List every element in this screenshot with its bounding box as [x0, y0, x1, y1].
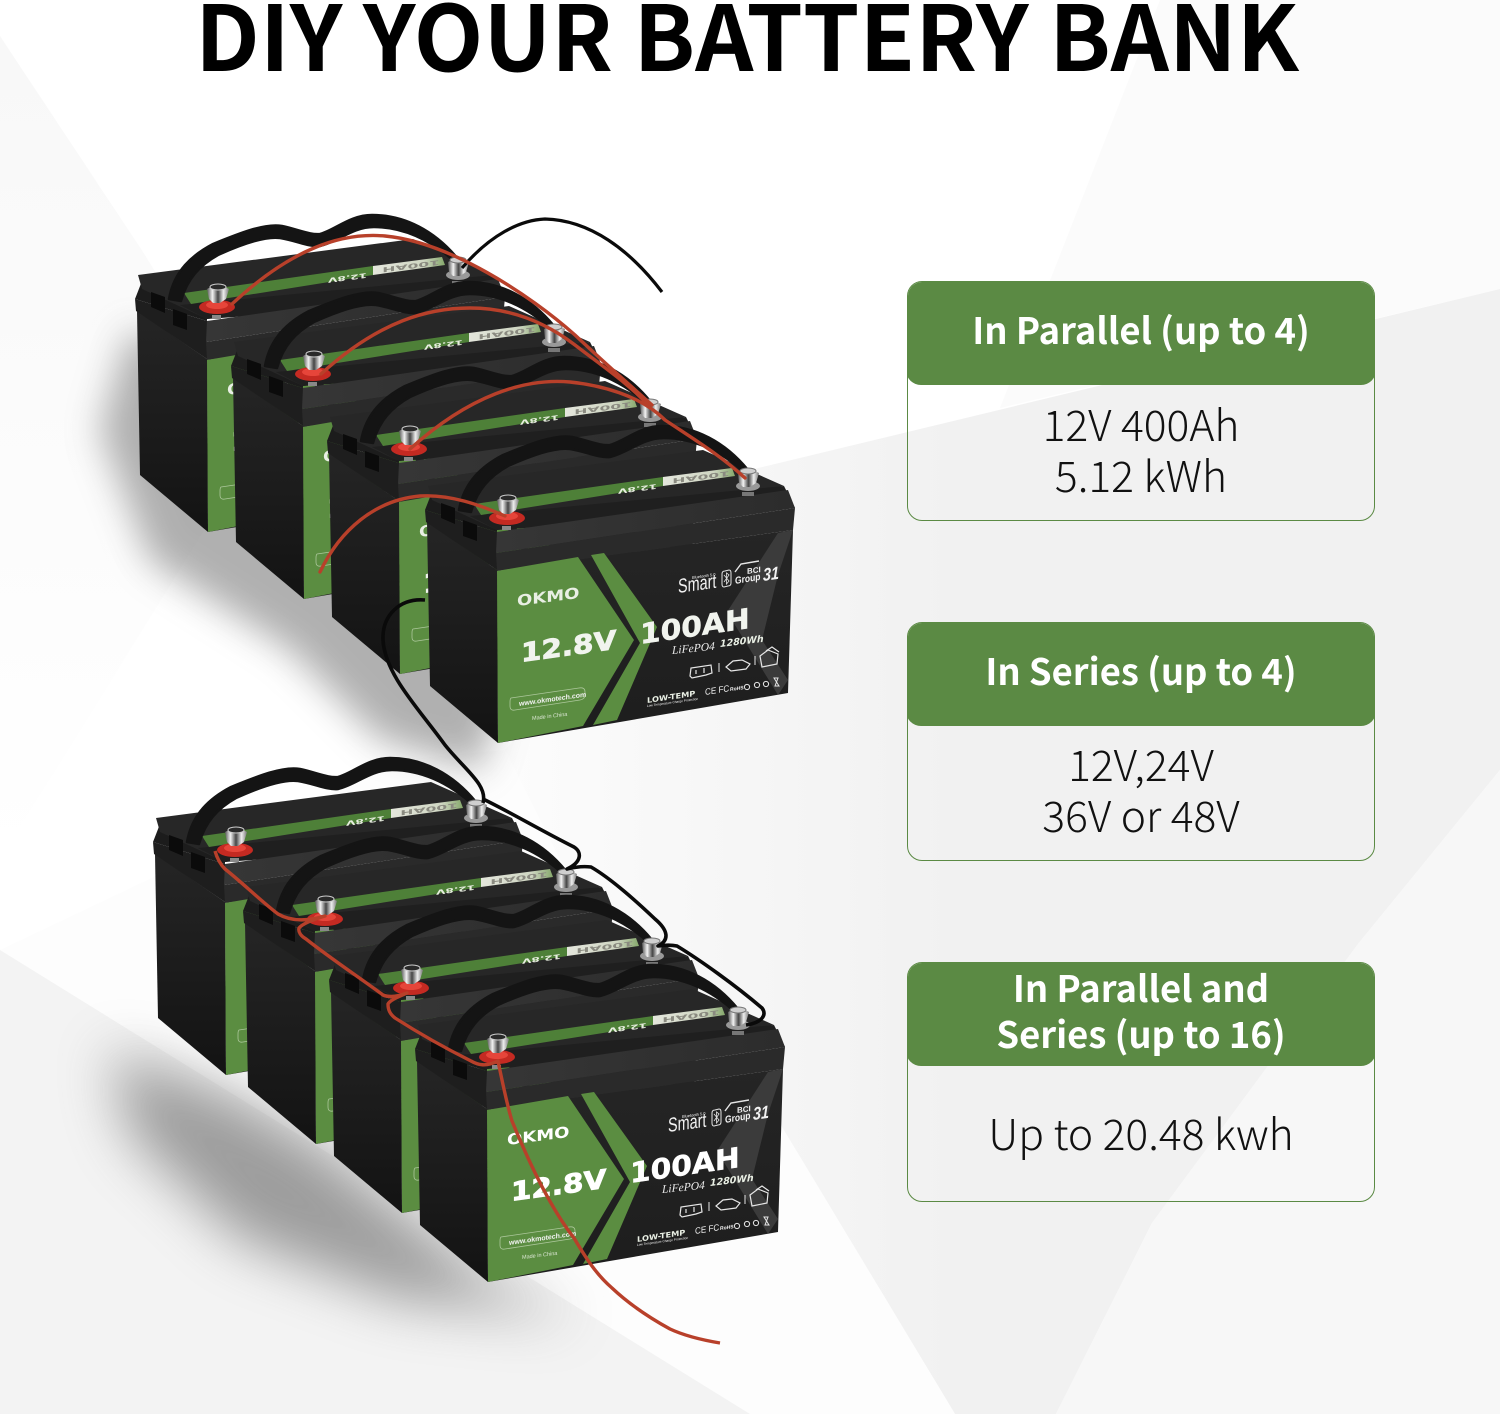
- upper battery 3: 12.8V: [520, 413, 559, 426]
- panel heading: parallel and series: Series (up to 16): [996, 1006, 1286, 1058]
- panel values: parallel and series: Up to 20.48 kwh: [988, 1102, 1294, 1163]
- lower battery 3: [329, 896, 699, 1213]
- upper front battery with label: Made in China: [532, 712, 568, 722]
- panel heading: in parallel: In Parallel (up to 4): [972, 302, 1310, 354]
- upper battery 2: OKMO: [323, 440, 385, 466]
- upper front battery with label: www.okmotech.com: [518, 692, 586, 708]
- shadow under upper battery row: [100, 330, 500, 770]
- upper battery 2: 12.8V: [327, 480, 423, 525]
- panel: in parallel: [907, 281, 1375, 521]
- panel: in series: [907, 622, 1375, 861]
- upper front battery with label: 12.8V: [521, 624, 617, 669]
- lower front battery with label: BCI: [737, 1104, 751, 1115]
- lower front battery with label: 100AH: [662, 1008, 720, 1024]
- upper battery 3: OKMO: [419, 515, 481, 541]
- lower front battery with label: Bluetooth 5.0: [682, 1111, 706, 1119]
- panel heading: parallel and series: In Parallel and: [1013, 962, 1269, 1012]
- red parallel cables: [232, 235, 745, 572]
- upper front battery with label: CE FC: [705, 683, 729, 697]
- lower front battery with label: 100AH: [630, 1141, 740, 1190]
- black cable linking upper and lower rows: [383, 600, 484, 803]
- lower battery 2: [243, 827, 613, 1144]
- lower front battery with label: RoHS: [720, 1224, 734, 1232]
- shadow under lower battery row: [110, 1050, 580, 1318]
- lower battery 2: 100AH: [490, 870, 548, 886]
- lower front battery with label: LOW-TEMP: [637, 1228, 686, 1244]
- panel values: in series: 12V,24V: [1068, 733, 1214, 794]
- lower battery 2: OKMO: [335, 985, 397, 1011]
- lower battery 1: [153, 758, 523, 1075]
- upper front battery with label: 1280Wh: [720, 634, 764, 650]
- lower front battery with label: LiFePO4: [661, 1180, 705, 1196]
- panel values: in parallel: [1043, 392, 1239, 504]
- lower front battery with label: [415, 965, 785, 1282]
- upper battery 1: [135, 215, 505, 532]
- black output cable: [462, 219, 662, 292]
- upper battery 3: [327, 357, 697, 674]
- upper front battery with label: BCI: [747, 565, 761, 576]
- upper front battery with label: 12.8V: [618, 482, 657, 495]
- lower front battery with label: Low Temperature Charge Protection: [637, 1236, 688, 1247]
- upper battery 1: 12.8V: [328, 271, 367, 284]
- lower battery 3: 100AH: [576, 939, 634, 955]
- black series cable: [483, 799, 764, 1025]
- lower battery 2: 12.8V: [436, 883, 475, 896]
- lower battery 1: 12.8V: [249, 956, 345, 1001]
- panel: in parallel and series: [907, 962, 1375, 1202]
- panel heading: parallel and series: [906, 961, 1376, 1066]
- panel values: in parallel: 5.12 kWh: [1055, 444, 1227, 504]
- upper front battery with label: RoHS: [730, 685, 744, 693]
- lower battery 1: 100AH: [400, 801, 458, 817]
- upper battery 2: [231, 282, 601, 599]
- upper front battery with label: 100AH: [640, 602, 750, 651]
- upper front battery with label: 100AH: [672, 469, 730, 485]
- lower front battery with label: 1280Wh: [710, 1173, 754, 1189]
- upper battery 3: 12.8V: [423, 555, 519, 600]
- lower front battery with label: Made in China: [522, 1251, 558, 1261]
- lower front battery with label: Group: [725, 1110, 751, 1125]
- lower front battery with label: 12.8V: [511, 1163, 607, 1208]
- lower front battery with label: www.okmotech.com: [508, 1231, 576, 1247]
- panel heading: in series: In Series (up to 4): [985, 644, 1297, 696]
- lower front battery with label: Smart: [668, 1108, 706, 1137]
- panel values: in series: [1042, 733, 1240, 845]
- upper battery row: [135, 215, 795, 803]
- upper front battery with label: OKMO: [517, 584, 579, 610]
- panel values: in series: 36V or 48V: [1042, 784, 1240, 845]
- lower front battery with label: OKMO: [507, 1123, 569, 1149]
- upper front battery with label: Low Temperature Charge Protection: [647, 697, 698, 708]
- upper front battery with label: Bluetooth 5.0: [692, 572, 716, 580]
- lower battery 2: 12.8V: [339, 1025, 435, 1070]
- lower battery 1: 12.8V: [346, 814, 385, 827]
- upper battery 3: 100AH: [574, 400, 632, 416]
- upper front battery with label: LiFePO4: [671, 641, 715, 657]
- upper front battery with label: [425, 426, 795, 743]
- lower battery 3: 12.8V: [522, 952, 561, 965]
- upper front battery with label: Group: [735, 571, 761, 586]
- panel heading: in parallel: [906, 280, 1376, 385]
- panel values: in parallel: 12V 400Ah: [1043, 392, 1239, 454]
- upper battery 1: 12.8V: [231, 413, 327, 458]
- panel heading: in series: [906, 621, 1376, 726]
- upper front battery with label: LOW-TEMP: [647, 689, 696, 705]
- upper front battery with label: 31: [763, 563, 779, 585]
- lower battery 3: OKMO: [421, 1054, 483, 1080]
- upper battery 1: OKMO: [227, 373, 289, 399]
- lower front battery with label: 31: [753, 1102, 769, 1124]
- upper front battery with label: Smart: [678, 569, 716, 598]
- lower battery row: [153, 758, 785, 1343]
- upper battery 2: 12.8V: [424, 338, 463, 351]
- upper battery 2: 100AH: [478, 325, 536, 341]
- upper battery 1: 100AH: [382, 258, 440, 274]
- lower battery 1: OKMO: [245, 916, 307, 942]
- red series cable: [215, 851, 720, 1343]
- lower battery 3: 12.8V: [425, 1094, 521, 1139]
- lower front battery with label: CE FC: [695, 1222, 719, 1236]
- lower front battery with label: 12.8V: [608, 1021, 647, 1034]
